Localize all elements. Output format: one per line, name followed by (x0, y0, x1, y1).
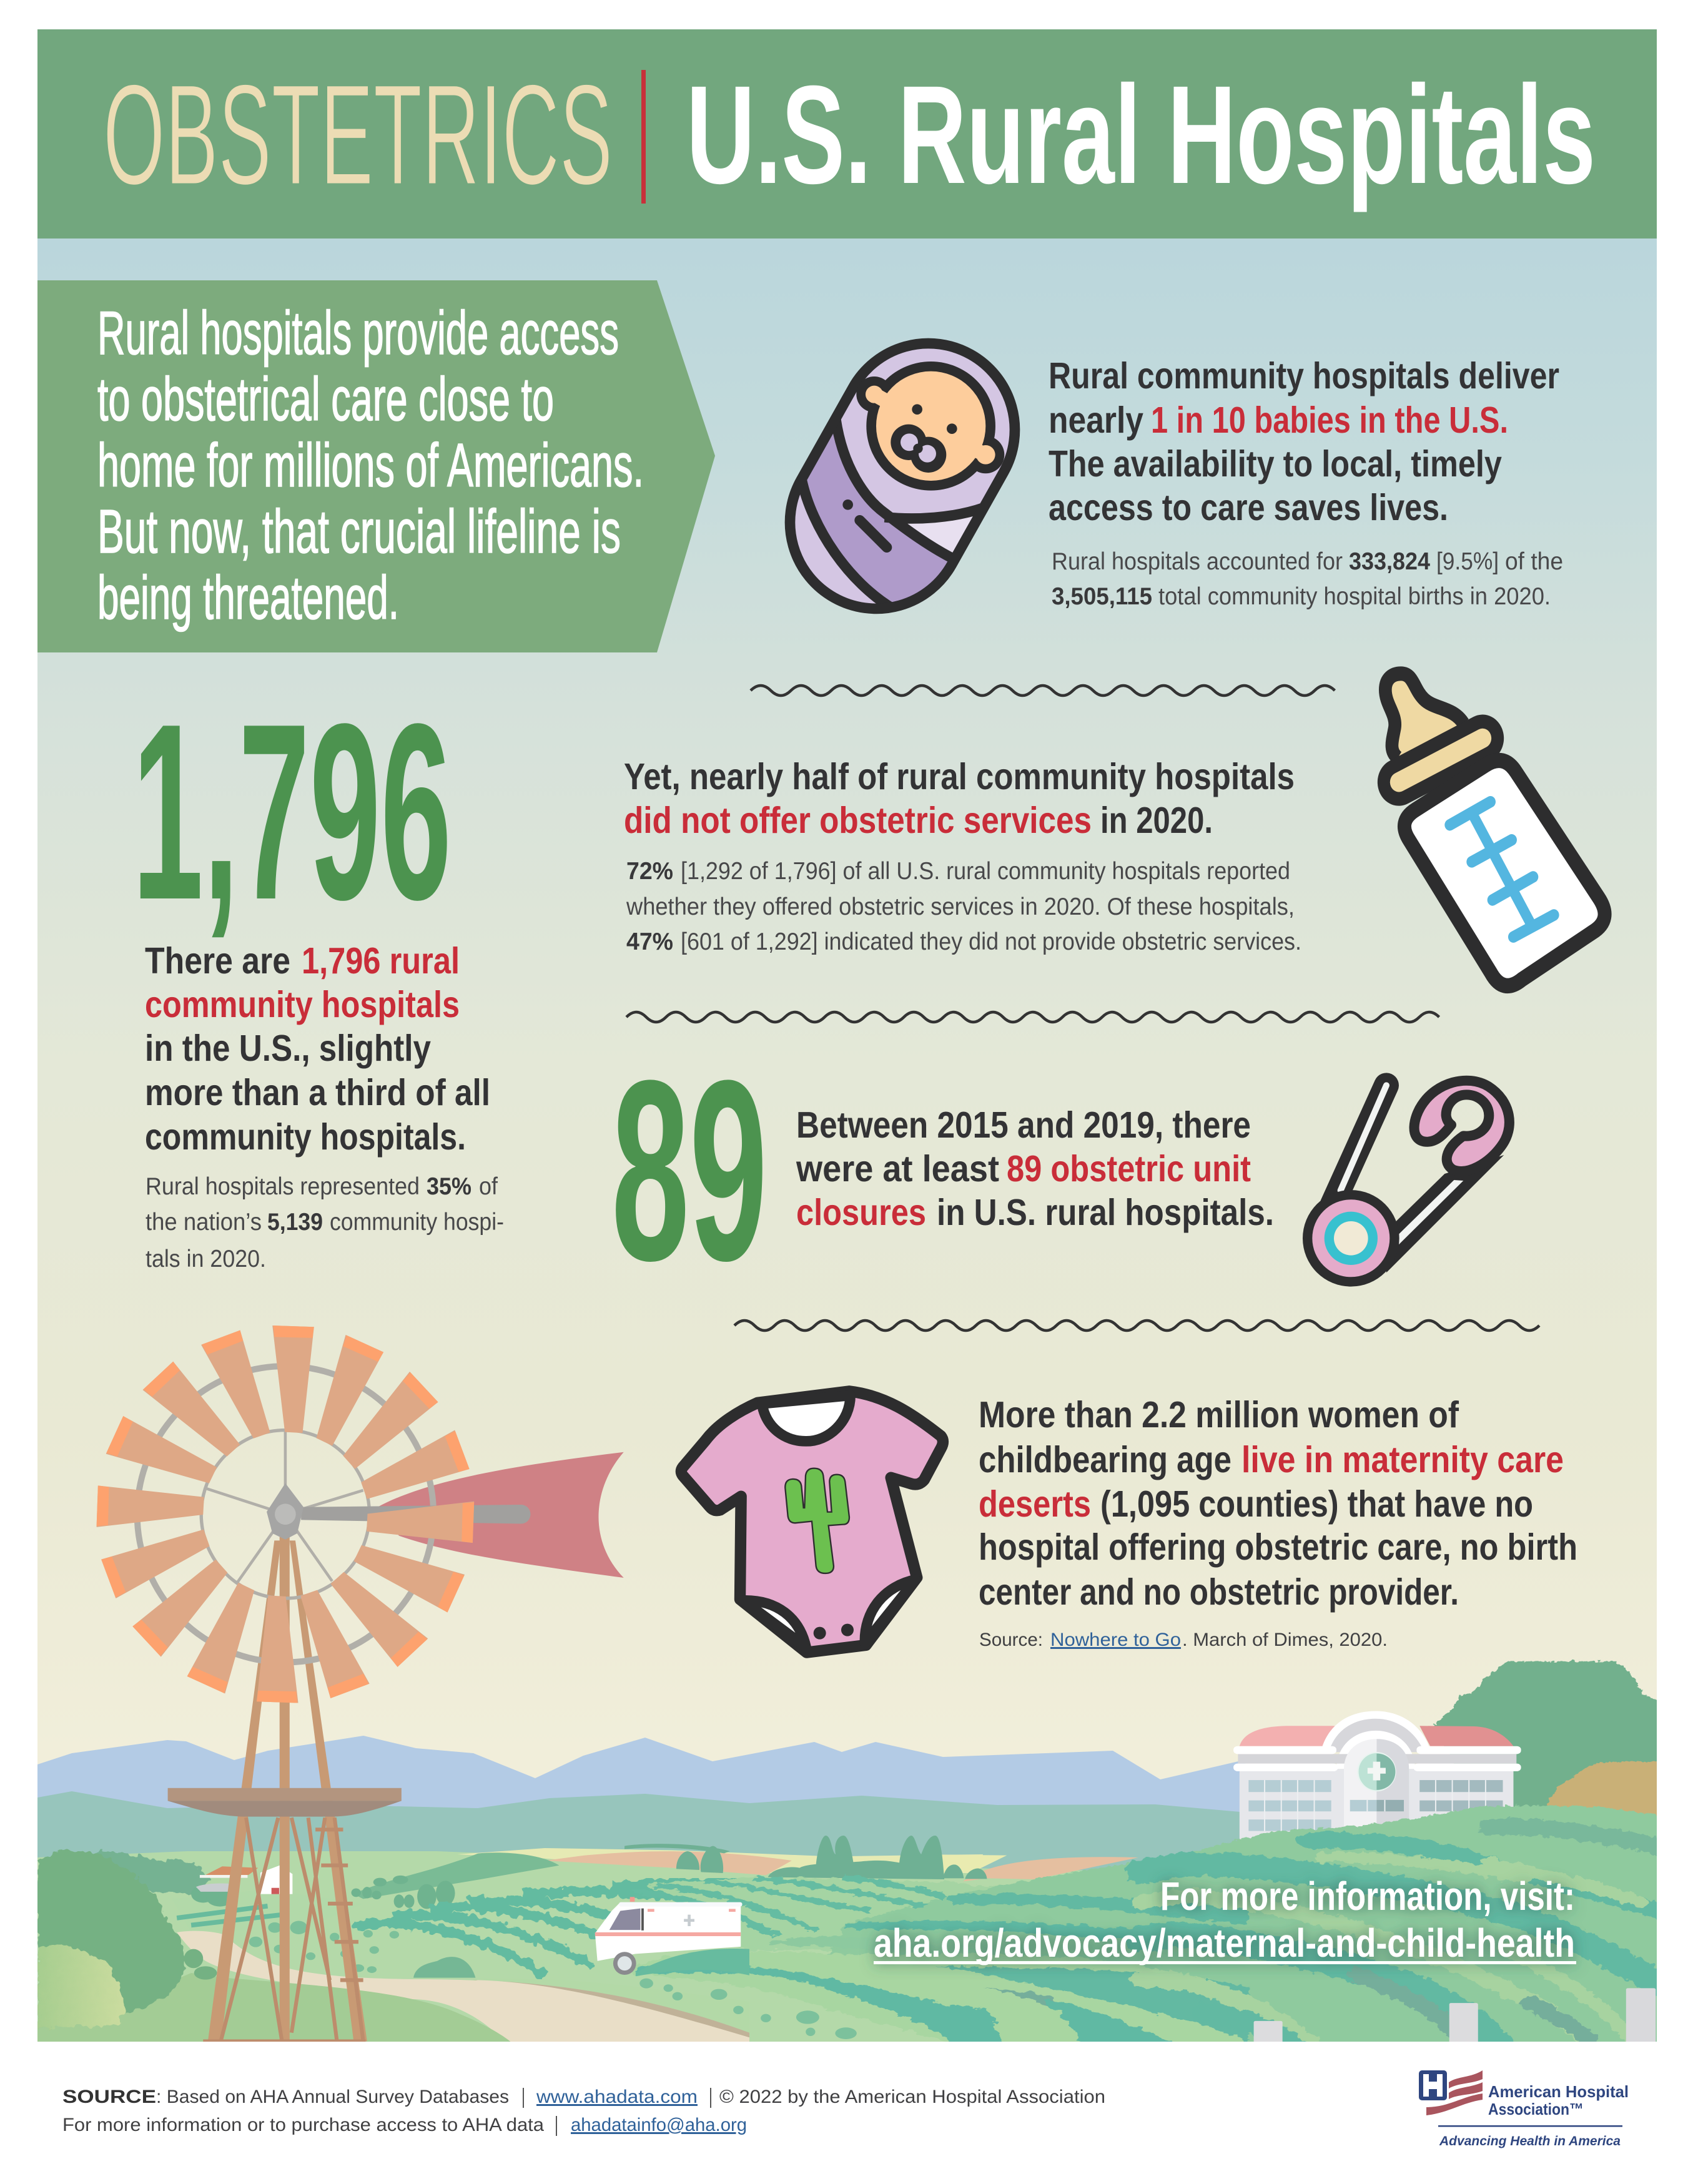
text: 1 in 10 babies: 3,505,115 (1052, 583, 1152, 610)
intro arrow panel: being threatened. (97, 563, 399, 632)
footer source text: SOURCE (62, 2087, 156, 2107)
text: maternity care deserts: More than 2.2 million women of (979, 1394, 1459, 1435)
icon: swaddled baby (790, 343, 1015, 610)
American Hospital Association logo: Association™ (1488, 2100, 1584, 2118)
big number 1,796: 1,796 (132, 672, 452, 952)
text: no obstetric services: 72% (626, 858, 673, 885)
teal hills (37, 1791, 1240, 1871)
text: 1 in 10 babies: The availability to local, timely (1049, 443, 1502, 485)
footer source text: ahadatainfo@aha.org (571, 2115, 747, 2135)
title banner: OBSTETRICS (103, 54, 613, 215)
text: maternity care deserts: Nowhere to Go (1050, 1630, 1181, 1650)
text: 1,796 rural community hospitals: tals in 2020. (146, 1246, 266, 1272)
text: 1 in 10 babies: nearly (1049, 400, 1143, 441)
footer source text: www.ahadata.com (536, 2087, 698, 2107)
text: no obstetric services: in 2020. (1100, 800, 1213, 841)
text: no obstetric services (624, 756, 1301, 955)
icon: onesie with cactus (681, 1391, 943, 1653)
text: 1,796 rural community hospitals: the nation’s (146, 1209, 262, 1236)
call to action: more information (874, 1874, 1576, 1965)
ambulance (595, 1897, 749, 1976)
text: no obstetric services: [601 of 1,292] indicated they did not provide obstetric services. (681, 928, 1301, 955)
fence posts (1254, 1988, 1656, 2044)
American Hospital Association logo: American Hospital (1488, 2082, 1629, 2101)
text: 1 in 10 babies: 333,824 (1349, 548, 1430, 575)
big number 89: 89 (611, 1027, 767, 1314)
windmill (97, 1326, 624, 2041)
text: no obstetric services: 47% (626, 928, 673, 955)
text: 89 closures: were at least (796, 1148, 999, 1189)
distant mountains (37, 1736, 1245, 1812)
footer source text: : Based on AHA Annual Survey Databases (156, 2087, 509, 2107)
text: 1,796 rural community hospitals: community hospi- (330, 1209, 504, 1236)
text: 1,796 rural community hospitals (145, 940, 504, 1272)
intro arrow panel: But now, that crucial lifeline is (97, 497, 621, 566)
left trees and fields (37, 1851, 749, 2057)
text: 1,796 rural community hospitals: 35% (427, 1173, 471, 1200)
text: 89 closures: Between 2015 and 2019, there (796, 1104, 1251, 1146)
text: 1 in 10 babies: of the (1505, 548, 1563, 575)
text: 1 in 10 babies: 1 in 10 babies in the U.S. (1151, 400, 1508, 441)
footer source text (62, 2087, 1105, 2136)
American Hospital Association logo (1419, 2070, 1629, 2148)
hospital building (1233, 1711, 1521, 1846)
title banner (37, 29, 1657, 239)
intro arrow panel: to obstetrical care close to (97, 365, 554, 433)
text: 1 in 10 babies: Rural hospitals accounted for (1052, 548, 1343, 575)
text: no obstetric services: did not offer obstetric services (624, 800, 1092, 841)
tree, bush, hospital and hill base (1035, 1661, 1671, 2055)
text: maternity care deserts: live in maternity care (1241, 1439, 1564, 1480)
intro arrow panel (37, 280, 715, 652)
text: 1 in 10 babies: total community hospital births in 2020. (1158, 583, 1551, 610)
call to action: more information: aha.org/advocacy/maternal-and-child-health (874, 1921, 1575, 1965)
text: 89 closures: in U.S. rural hospitals. (937, 1192, 1274, 1233)
text: 1,796 rural community hospitals: 5,139 (267, 1209, 323, 1236)
text: 1,796 rural community hospitals: There are (145, 940, 290, 981)
text: 89 closures: closures (796, 1192, 926, 1233)
text: 1,796 rural community hospitals: community hospitals (145, 984, 460, 1025)
text: no obstetric services: Yet, nearly half of rural community hospitals (624, 756, 1295, 797)
text: 1 in 10 babies: Rural community hospitals deliver (1049, 355, 1559, 396)
text: no obstetric services: whether they offered obstetric services in 2020. Of these hospitals, (626, 893, 1295, 920)
text: maternity care deserts: . March of Dimes, 2020. (1182, 1630, 1388, 1650)
main hill crop rows (1141, 1826, 1671, 2055)
central field rows (633, 1862, 1249, 2048)
text: maternity care deserts: center and no obstetric provider. (979, 1572, 1459, 1613)
American Hospital Association logo: Advancing Health in America (1439, 2134, 1621, 2148)
landscape illustration (37, 1326, 1671, 2057)
text: 1,796 rural community hospitals: of (479, 1173, 498, 1200)
text: maternity care deserts: deserts (979, 1483, 1091, 1525)
icon: safety pin (1303, 1081, 1509, 1287)
text: 1,796 rural community hospitals: 1,796 rural (302, 940, 460, 981)
text: 1,796 rural community hospitals: more than a third of all (145, 1072, 490, 1113)
text: 1,796 rural community hospitals: community hospitals. (145, 1116, 466, 1158)
text: no obstetric services: [1,292 of 1,796] of all U.S. rural community hospitals reported (681, 858, 1290, 885)
intro arrow panel: Rural hospitals provide access (97, 298, 619, 367)
text: 1 in 10 babies: access to care saves lives. (1049, 487, 1448, 528)
sky gradient panel (37, 239, 1657, 2042)
text: 1 in 10 babies (1049, 355, 1563, 610)
text: 89 closures: 89 obstetric unit (1007, 1148, 1251, 1189)
call to action: more information: For more information, visit: (1160, 1874, 1575, 1919)
text: 89 closures (796, 1104, 1274, 1233)
footer source text: © 2022 by the American Hospital Association (719, 2087, 1105, 2107)
text: 1,796 rural community hospitals: Rural hospitals represented (146, 1173, 420, 1200)
text: maternity care deserts: hospital offering obstetric care, no birth (979, 1527, 1577, 1568)
text: maternity care deserts: (1,095 counties) that have no (1100, 1483, 1533, 1525)
intro arrow panel: home for millions of Americans. (97, 431, 644, 499)
icon: baby bottle (1385, 674, 1605, 986)
text: maternity care deserts: childbearing age (979, 1439, 1231, 1480)
text: 1,796 rural community hospitals: in the U.S., slightly (145, 1028, 431, 1069)
far field patches (457, 1836, 1138, 1881)
text: maternity care deserts: Source: (979, 1630, 1043, 1650)
footer source text: For more information or to purchase access to AHA data (62, 2115, 544, 2135)
mid field base (37, 1851, 1083, 2042)
text: 1 in 10 babies: [9.5%] (1436, 548, 1499, 575)
foreground road (476, 1980, 749, 2042)
text: maternity care deserts (979, 1394, 1577, 1650)
